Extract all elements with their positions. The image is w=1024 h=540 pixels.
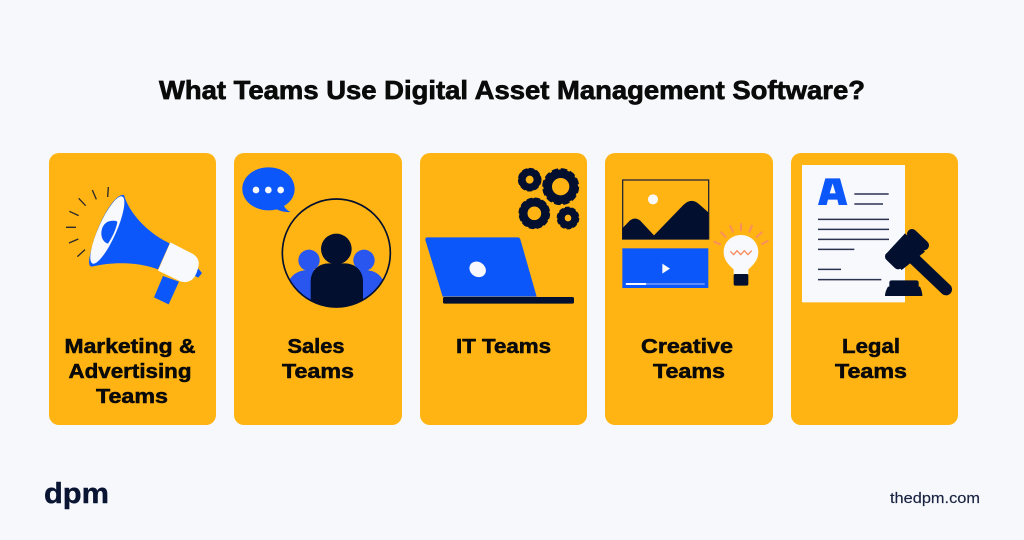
- panel: sales teams: [234, 153, 402, 425]
- panel: IT teams: [420, 153, 587, 425]
- label: marketing and advertising teams: Advertising: [68, 360, 192, 383]
- label: marketing and advertising teams: Marketing &: [64, 335, 196, 358]
- label: legal teams: [835, 335, 907, 383]
- panel: marketing and advertising teams: [49, 153, 216, 425]
- panel: creative teams: [605, 153, 773, 425]
- icon: image, video and light bulb: [622, 180, 768, 288]
- icon: laptop and gears: [425, 169, 578, 304]
- label: sales teams: Teams: [282, 360, 354, 383]
- logo: dpm: dpm: [44, 478, 109, 510]
- label: creative teams: [641, 335, 733, 383]
- label: creative teams: Teams: [653, 360, 725, 383]
- label: marketing and advertising teams: [64, 335, 196, 408]
- website url: thedpm.com: [890, 491, 980, 507]
- label: sales teams: Sales: [288, 335, 344, 358]
- panel: legal teams: [791, 153, 958, 425]
- label: legal teams: Legal: [842, 335, 900, 358]
- title: What Teams Use Digital Asset Management Software?: [159, 75, 865, 105]
- label: creative teams: Creative: [641, 335, 733, 358]
- label: IT teams: IT Teams: [456, 335, 551, 358]
- icon: speech bubble and team: [242, 167, 390, 310]
- label: sales teams: [282, 335, 354, 383]
- label: marketing and advertising teams: Teams: [96, 385, 168, 408]
- icon: megaphone: [66, 187, 202, 304]
- label: legal teams: Teams: [835, 360, 907, 383]
- icon: document and gavel: [802, 165, 946, 302]
